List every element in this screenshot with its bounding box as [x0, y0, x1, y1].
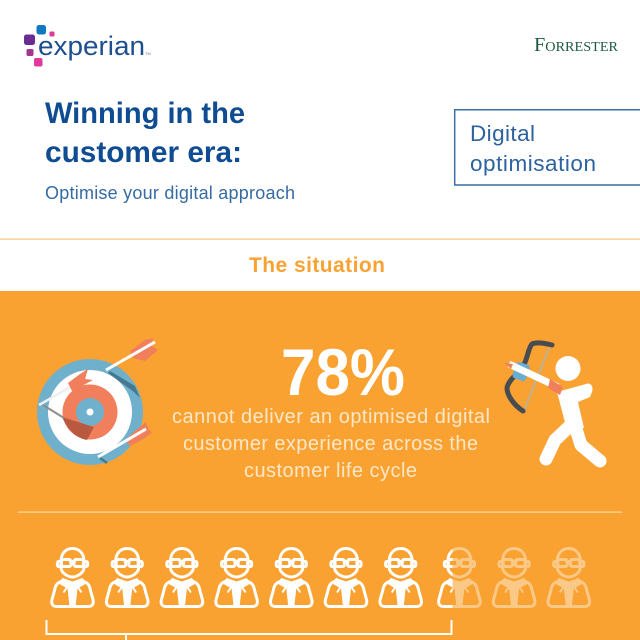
title: customer era: — [45, 136, 242, 169]
person 8, half highlighted — [439, 548, 480, 606]
icon: archer with bow — [504, 343, 600, 461]
subtitle: Optimise your digital approach — [45, 183, 295, 203]
title: Winning in the — [45, 97, 245, 130]
wordmark: experian: experian — [38, 31, 145, 61]
category label box: Digital optimisation: optimisation — [470, 151, 596, 176]
logo: Experian — [24, 25, 151, 66]
person 2 — [106, 548, 148, 606]
person 10 — [548, 548, 590, 606]
description text: customer experience across the — [183, 433, 478, 455]
pictogram: 10 people, 7.5 highlighted — [52, 548, 590, 606]
person 7 — [380, 548, 422, 606]
description text: cannot deliver an optimised digital — [172, 406, 490, 428]
logo: Forrester: FORRESTER — [534, 34, 619, 56]
icon: Experian coloured squares — [24, 25, 54, 66]
section band: The situation: The situation — [249, 254, 385, 277]
person 5 — [270, 548, 312, 606]
divider — [18, 512, 622, 513]
person 3 — [161, 548, 203, 606]
person 6 — [325, 548, 367, 606]
category label box: Digital optimisation — [455, 110, 640, 185]
title — [45, 97, 245, 169]
category label box: Digital optimisation: Digital — [470, 121, 535, 146]
panel: the situation — [0, 291, 640, 640]
statistic: 78%: 78% — [281, 335, 405, 409]
person 9 — [493, 548, 535, 606]
description text — [172, 406, 490, 482]
person 4 — [216, 548, 257, 606]
description text: customer life cycle — [244, 460, 417, 482]
bracket — [46, 620, 452, 640]
icon: target with arrows — [37, 338, 158, 465]
person 1 — [52, 548, 93, 606]
trademark mark: TM — [145, 51, 151, 56]
